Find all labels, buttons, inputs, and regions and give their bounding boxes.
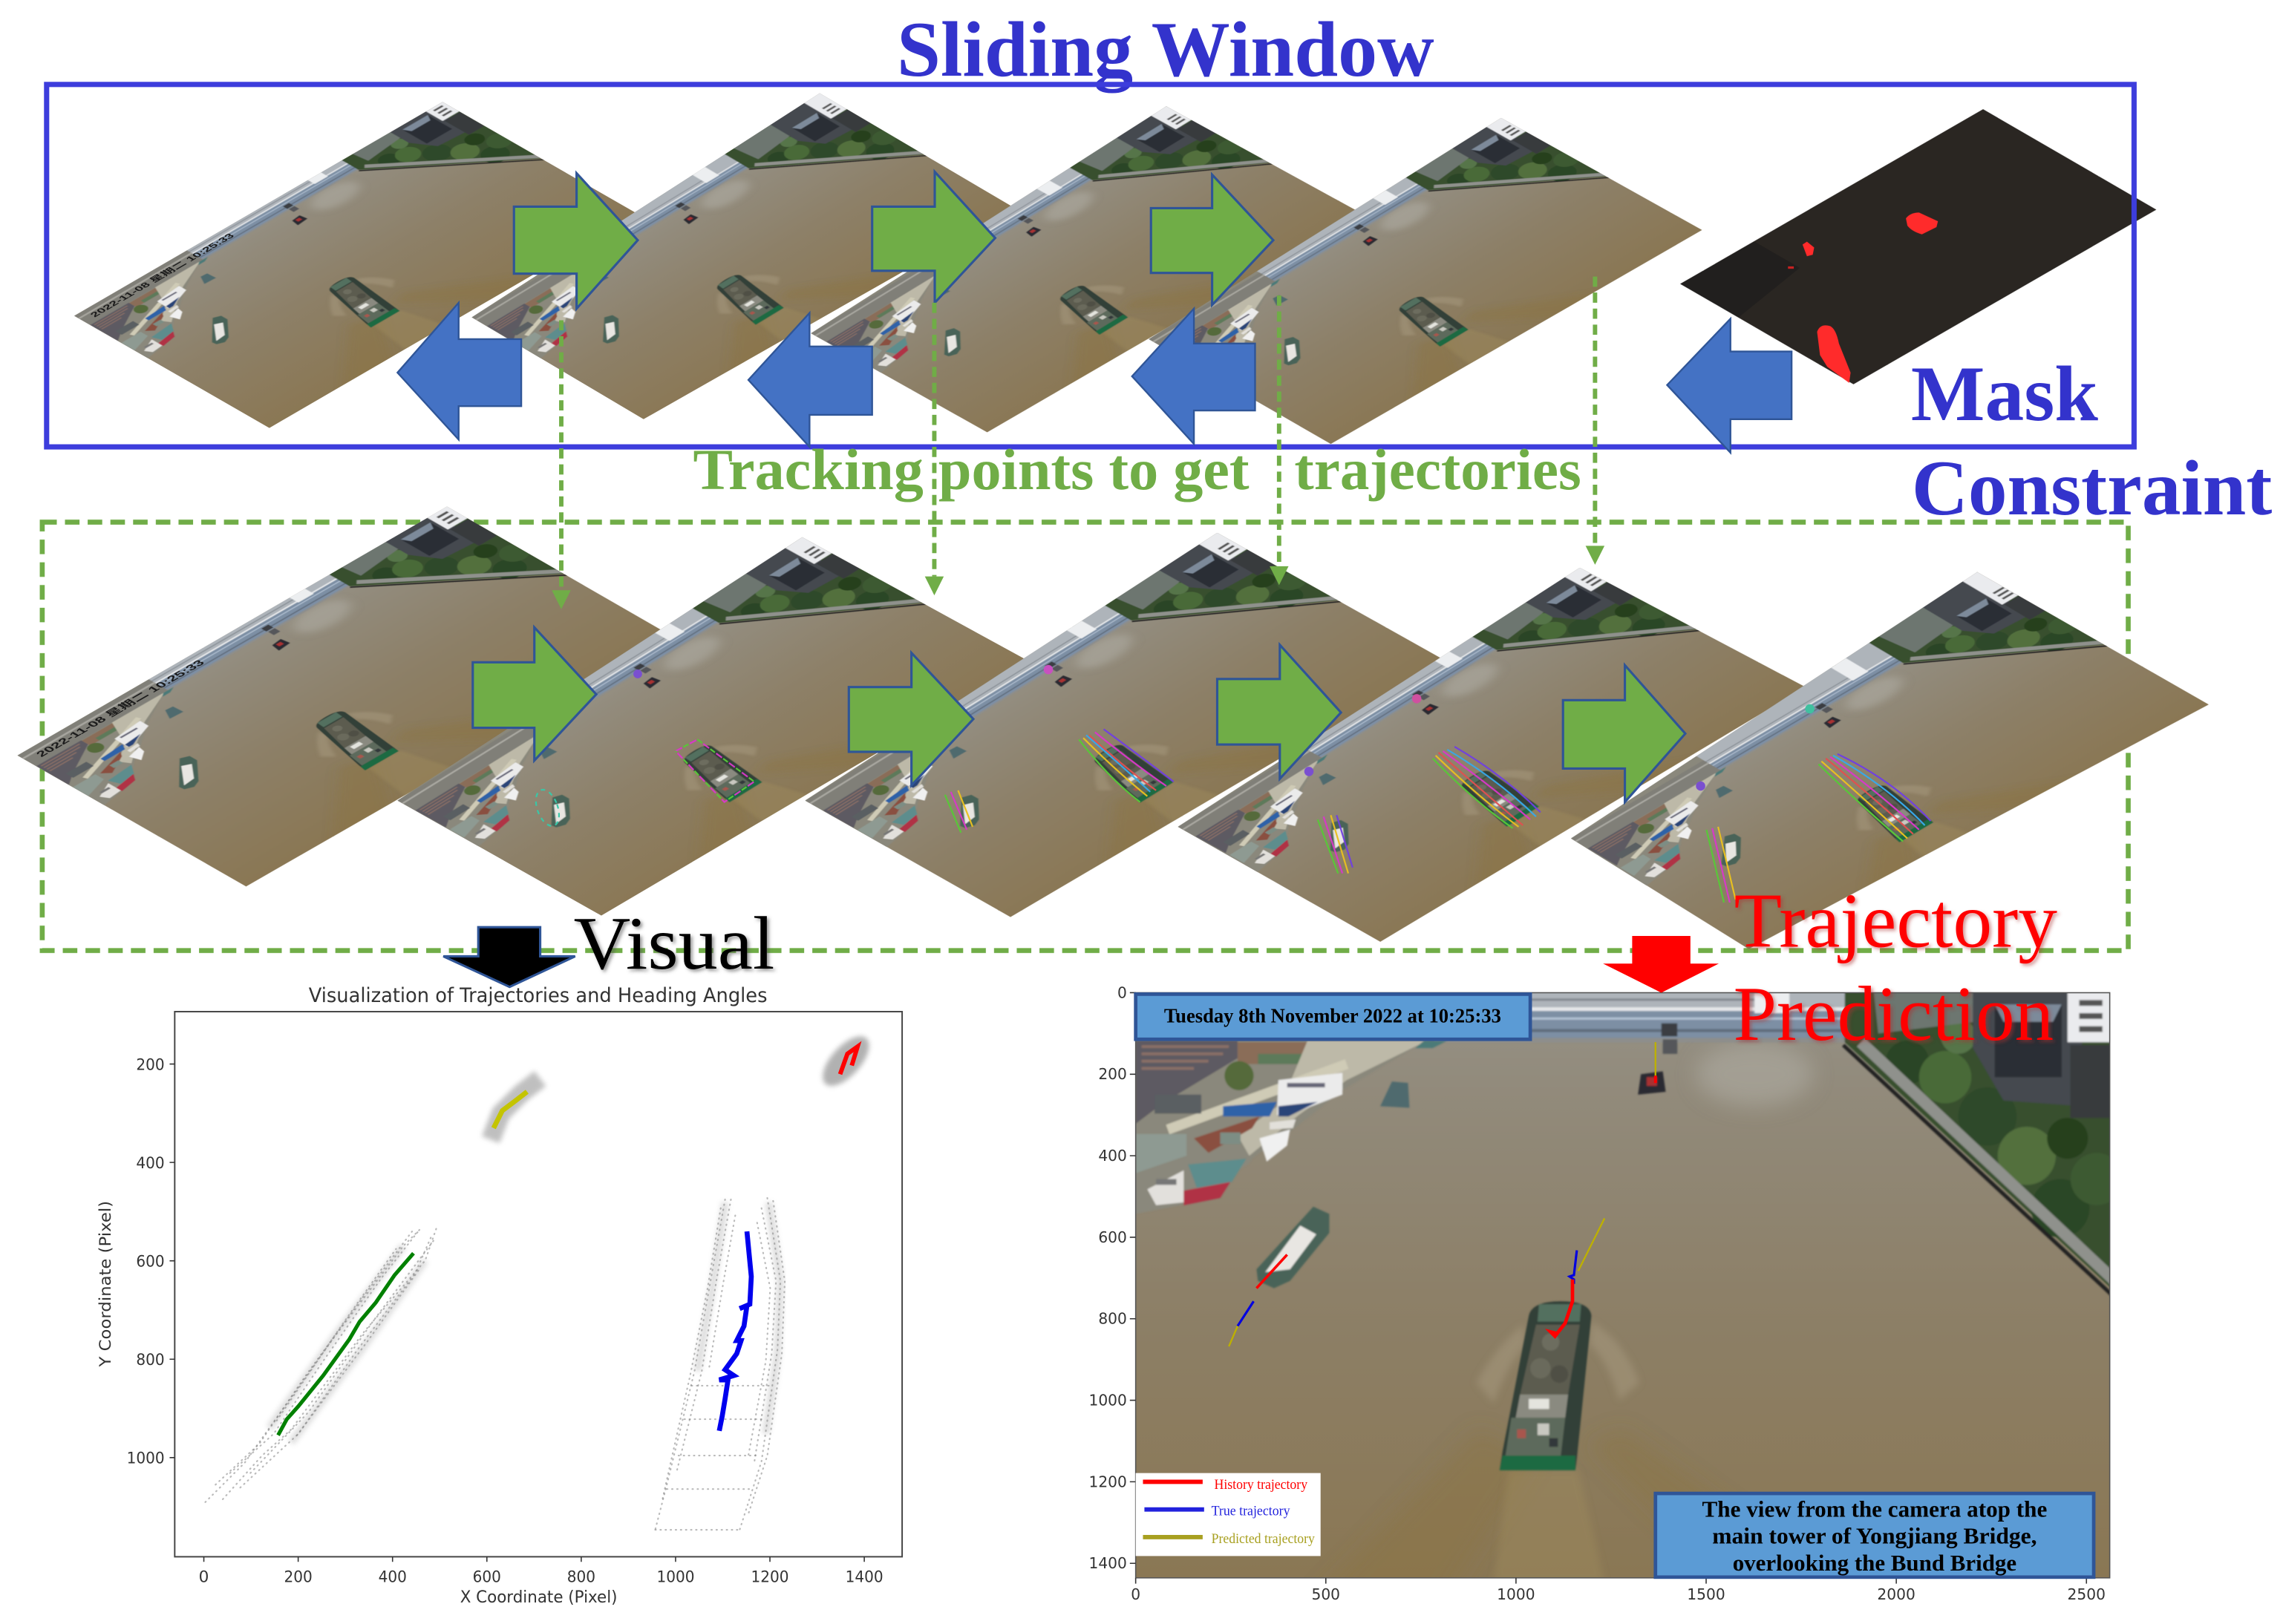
x axis ticks and labels: 1400 [846, 1568, 884, 1587]
y axis labels of camera view: 1200 [1088, 1473, 1127, 1490]
arrow: right 1 [514, 173, 638, 309]
arrow: right 2 [872, 171, 995, 303]
y axis ticks and labels: 1000 [127, 1450, 165, 1468]
y axis labels of camera view: 800 [1098, 1310, 1127, 1328]
x axis labels of camera view: 2000 [1877, 1585, 1915, 1603]
mask image with red ship regions [1680, 109, 2156, 384]
y axis labels of camera view: 600 [1098, 1228, 1127, 1246]
legend: predicted trajectory: Predicted trajectory [1212, 1531, 1315, 1547]
label: Constraint: Constraint [1912, 445, 2272, 531]
label: Prediction: Prediction [1734, 971, 2054, 1057]
caption box: overlooking the Bund Bridge [1733, 1551, 2016, 1576]
x axis labels of camera view: 0 [1131, 1585, 1140, 1603]
blue trajectory with point cloud [655, 1198, 785, 1530]
yellow trajectory with point cloud [491, 1078, 540, 1140]
caption box [1656, 1493, 2094, 1577]
camera view image with trajectories [1090, 963, 2110, 1600]
red trajectory with point cloud [814, 1029, 878, 1093]
arrow: left 2 [748, 313, 872, 447]
frame row 1: image 1: 2022-11-08 星期二 10:25:33 [88, 232, 237, 318]
x axis title: X Coordinate (Pixel) [460, 1588, 618, 1607]
y axis title: Y Coordinate (Pixel) [97, 1201, 115, 1368]
x axis ticks and labels: 400 [379, 1568, 407, 1587]
label: Tracking points to get: Tracking points to get [693, 437, 1250, 502]
frame row 2: image 1 [0, 465, 731, 919]
legend: history trajectory: History trajectory [1215, 1477, 1307, 1493]
arrow: left 1 [397, 303, 521, 439]
scatter chart: trajectories and heading angles [97, 1012, 902, 1607]
y axis labels of camera view: 200 [1098, 1065, 1127, 1083]
y axis ticks and labels [127, 1055, 174, 1468]
x axis labels of camera view: 1000 [1497, 1585, 1535, 1603]
y axis labels of camera view [1088, 983, 1136, 1572]
x axis ticks and labels: 1000 [656, 1568, 694, 1587]
arrow: row 2 right 2 [849, 653, 973, 785]
dashed arrow 1 [552, 320, 571, 609]
frame row 1: image 4 [1088, 86, 1748, 474]
y axis labels of camera view: 0 [1117, 983, 1127, 1001]
x axis ticks and labels: 1200 [751, 1568, 789, 1587]
arrow: red down [1603, 936, 1719, 992]
y axis labels of camera view: 1400 [1088, 1554, 1127, 1572]
legend: true trajectory: True trajectory [1212, 1504, 1290, 1519]
frame row 1: image 1 [12, 66, 685, 455]
caption box: The view from the camera atop the [1702, 1496, 2047, 1522]
frame row 1: image 3 [751, 75, 1408, 464]
history, true and predicted trajectories [1229, 1042, 1656, 1346]
x axis ticks and labels [199, 1556, 884, 1587]
x axis ticks and labels: 0 [199, 1568, 209, 1587]
frame row 2: image 5 with trajectories [1502, 542, 2261, 992]
title: Sliding Window: Sliding Window [897, 6, 1434, 93]
green trajectory with point cloud [206, 1227, 437, 1502]
x axis labels of camera view: 2500 [2068, 1585, 2106, 1603]
legend [1136, 1473, 1321, 1556]
arrow: black down [443, 927, 575, 987]
label: Visual: Visual [574, 902, 774, 986]
arrow: left from mask [1667, 318, 1792, 453]
chart title: Visualization of Trajectories and Heading Angles [309, 984, 767, 1007]
date label box [1136, 994, 1530, 1039]
x axis ticks and labels: 200 [284, 1568, 313, 1587]
x axis ticks and labels: 600 [473, 1568, 501, 1587]
arrow: row 2 right 3 [1217, 645, 1341, 779]
dashed arrow 3 [1270, 295, 1289, 585]
frame row 2: image 4 with trajectories [1109, 529, 1858, 975]
dashed arrow 4 [1586, 277, 1604, 565]
caption box: main tower of Yongjiang Bridge, [1712, 1524, 2037, 1549]
y axis labels of camera view: 1000 [1088, 1391, 1127, 1409]
arrow: row 2 right 1 [473, 627, 596, 761]
label: Trajectory: Trajectory [1734, 878, 2058, 964]
arrow: right 3 [1151, 174, 1273, 305]
frame row 2: image 1: 2022-11-08 星期二 10:25:33 [33, 658, 208, 759]
y axis ticks and labels: 600 [136, 1253, 165, 1271]
x axis ticks and labels: 800 [567, 1568, 595, 1587]
frame row 1: image 2 [412, 64, 1060, 453]
sliding window frame [47, 85, 2134, 447]
frame row 2: image 3 with trajectories [735, 497, 1499, 955]
arrow: left 3 [1132, 309, 1255, 444]
arrow: row 2 right 4 [1563, 665, 1685, 802]
x axis labels of camera view: 500 [1312, 1585, 1340, 1603]
x axis labels of camera view [1131, 1578, 2106, 1603]
label: Mask: Mask [1911, 350, 2098, 437]
y axis ticks and labels: 400 [136, 1154, 165, 1173]
tracking frame [42, 522, 2129, 951]
y axis labels of camera view: 400 [1098, 1147, 1127, 1165]
y axis ticks and labels: 200 [136, 1055, 165, 1074]
x axis labels of camera view: 1500 [1687, 1585, 1725, 1603]
frame row 2: image 2 with tracked outlines [328, 501, 1083, 952]
date label box: Tuesday 8th November 2022 at 10:25:33 [1164, 1005, 1501, 1027]
y axis ticks and labels: 800 [136, 1351, 165, 1369]
dashed arrow 2 [925, 303, 944, 595]
label: trajectories: trajectories [1294, 437, 1581, 502]
